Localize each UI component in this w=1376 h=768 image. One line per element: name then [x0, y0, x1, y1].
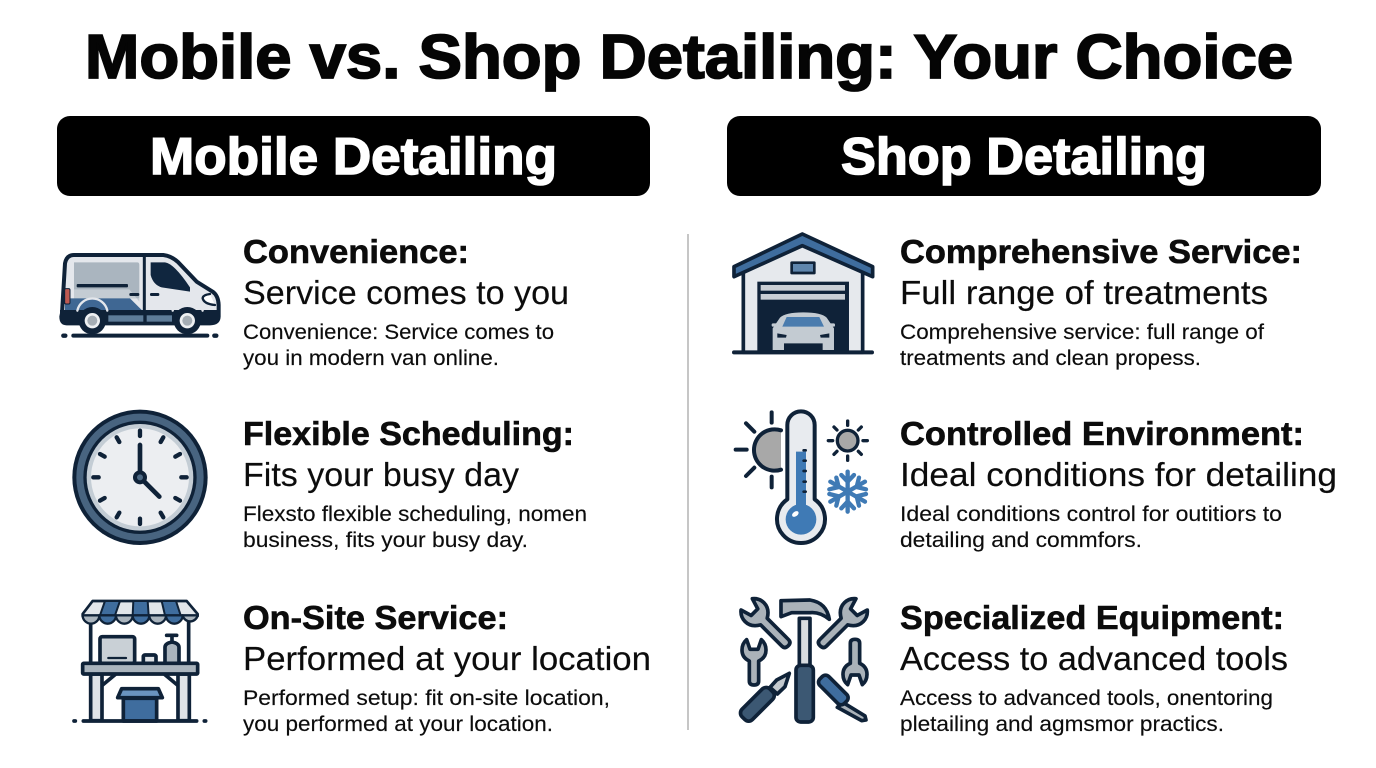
text: convenience: Convenience: Service comes to [243, 320, 554, 344]
header: shop detailing [727, 116, 1321, 196]
text: specialized equipment [900, 599, 1288, 736]
icon: clock [72, 410, 208, 545]
header: mobile detailing: Mobile Detailing [150, 128, 557, 186]
icon: garage [734, 234, 873, 352]
text: flexible scheduling: Flexsto flexible scheduling, nomen [243, 502, 587, 526]
text: controlled environment [900, 415, 1337, 552]
text: on-site service: Performed setup: fit on-site location, [243, 686, 610, 710]
icon: tools [737, 595, 871, 723]
text: comprehensive service: treatments and clean propess. [900, 346, 1201, 370]
text: controlled environment: Ideal conditions for detailing [900, 456, 1337, 493]
text: on-site service: Performed at your location [243, 640, 651, 677]
text: convenience [243, 233, 569, 370]
text: controlled environment: Ideal conditions control for outitiors to [900, 502, 1282, 526]
text: flexible scheduling: Flexible Scheduling: [243, 415, 574, 452]
header: mobile detailing [57, 116, 650, 196]
text: flexible scheduling: business, fits your busy day. [243, 528, 528, 552]
text: flexible scheduling: Fits your busy day [243, 456, 520, 493]
text: on-site service: On-Site Service: [243, 599, 508, 636]
title: Mobile vs. Shop Detailing: Your Choice [85, 23, 1293, 92]
text: controlled environment: detailing and commfors. [900, 528, 1142, 552]
text: flexible scheduling [243, 415, 587, 552]
text: on-site service [243, 599, 651, 736]
header: shop detailing: Shop Detailing [841, 128, 1207, 186]
text: convenience: you in modern van online. [243, 346, 499, 370]
text: comprehensive service: Comprehensive Service: [900, 233, 1302, 270]
text: comprehensive service: Comprehensive service: full range of [900, 320, 1264, 344]
icon: thermometer with sun and snowflake [736, 411, 867, 543]
text: specialized equipment: Specialized Equipment: [900, 599, 1284, 636]
text: specialized equipment: pletailing and agmsmor practics. [900, 712, 1224, 736]
text: convenience: Convenience: [243, 233, 469, 270]
text: on-site service: you performed at your location. [243, 712, 553, 736]
text: controlled environment: Controlled Environment: [900, 415, 1304, 452]
text: comprehensive service: Full range of treatments [900, 274, 1268, 311]
text: specialized equipment: Access to advanced tools, onentoring [900, 686, 1273, 710]
icon: on-site stall [74, 601, 206, 721]
icon: van [60, 255, 219, 336]
text: convenience: Service comes to you [243, 274, 569, 311]
text: comprehensive service [900, 233, 1302, 370]
text: specialized equipment: Access to advanced tools [900, 640, 1288, 677]
